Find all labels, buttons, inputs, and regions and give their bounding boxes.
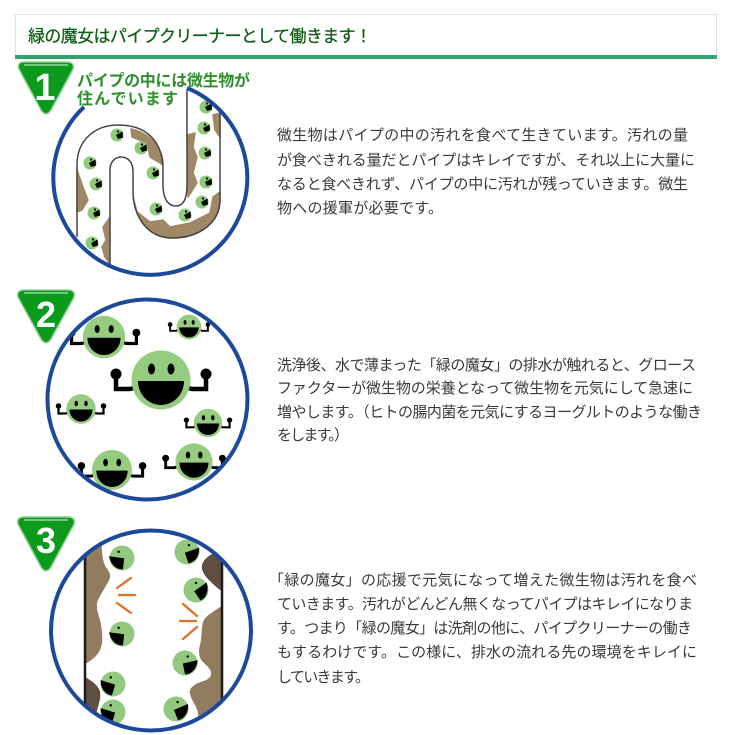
text block: step 1: 微生物はパイプの中の汚れを食べて生きています。汚れの量	[277, 127, 688, 144]
circle frame	[48, 300, 248, 500]
text block: step 2	[277, 357, 702, 444]
text block: step 2: ファクターが微生物の栄養となって微生物を元気にして急速に	[277, 380, 693, 397]
panel: step 3 illustration	[51, 530, 251, 735]
circle frame	[53, 88, 247, 275]
happy microbes	[56, 315, 232, 490]
text block: step 3: ていきます。汚れがどんどん無くなってパイプはキレイになりま	[277, 596, 693, 613]
pipe interior with eating microbes	[85, 530, 222, 735]
text block: step 3: もするわけです。この様に、排水の流れる先の環境をキレイに	[277, 644, 697, 661]
text block: step 3: す。つまり「緑の魔女」は洗剤の他に、パイプクリーナーの働き	[277, 620, 692, 637]
pipe with dirt and microbes	[77, 90, 220, 265]
impact dashes	[117, 578, 197, 639]
label: step 1 illustration caption	[77, 71, 250, 108]
badge: step 1	[18, 62, 73, 114]
panel: step 1 illustration	[53, 88, 247, 275]
text block: step 1	[277, 127, 695, 217]
text block: step 3: していきます。	[277, 669, 370, 686]
label: step 1 illustration caption: パイプの中には微生物が	[77, 71, 250, 90]
circle frame	[51, 530, 251, 730]
badge: step 3	[18, 517, 74, 571]
label: step 1 illustration caption: 住んでいます	[77, 89, 178, 108]
text block: step 3: 「緑の魔女」の応援で元気になって増えた微生物は汚れを食べ	[269, 572, 697, 589]
number 3: 3	[36, 520, 56, 561]
text block: step 1: 物への援軍が必要です。	[277, 200, 443, 217]
panel: step 2 illustration	[48, 300, 248, 500]
title: 緑の魔女はパイプクリーナーとして働きます！	[28, 27, 372, 46]
text block: step 1: が食べきれる量だとパイプはキレイですが、それ以上に大量に	[277, 152, 695, 169]
text block: step 1: なると食べきれず、パイプの中に汚れが残っていきます。微生	[277, 176, 688, 193]
badge: step 2	[18, 290, 74, 343]
text block: step 3	[269, 572, 697, 686]
text block: step 2: 洗浄後、水で薄まった「緑の魔女」の排水が触れると、グロース	[277, 357, 696, 374]
header: title bar	[15, 14, 717, 59]
number 2: 2	[36, 294, 56, 335]
text block: step 2: 増やします。（ヒトの腸内菌を元気にするヨーグルトのような働き	[277, 404, 702, 421]
number 1: 1	[34, 67, 56, 109]
text block: step 2: をします。）	[277, 427, 349, 444]
